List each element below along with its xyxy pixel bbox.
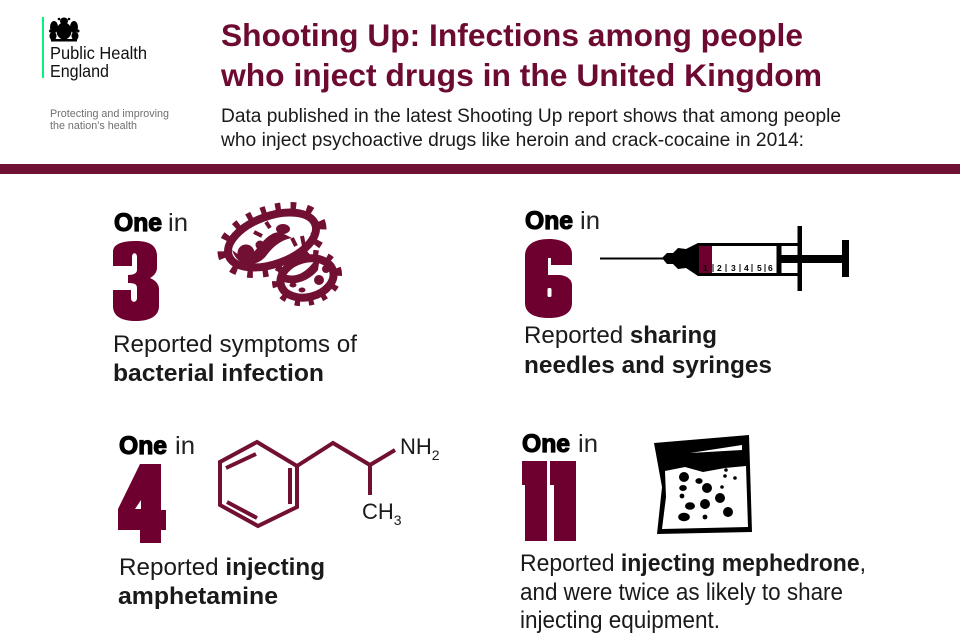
syringe scale numbers: 4 <box>744 263 749 273</box>
logo name <box>50 43 147 81</box>
label: one in: in <box>580 207 600 235</box>
big number 6: 6 <box>552 279 569 312</box>
logo name: England <box>50 61 109 81</box>
syringe scale numbers: 5 <box>757 263 762 273</box>
big number 11: 1 <box>556 500 575 538</box>
text: reported sharing: needles and syringes <box>524 352 772 379</box>
title: Shooting Up: Infections among people <box>221 17 803 53</box>
label: one in: One <box>119 432 167 460</box>
label: one in: in <box>168 209 188 237</box>
big number 4 <box>118 464 166 543</box>
syringe scale numbers: 2 <box>717 263 722 273</box>
icon: amphetamine molecule: 2 <box>432 447 440 463</box>
text: reported injecting mephedrone: Reported injecting mephedrone, <box>520 550 866 577</box>
text: reported injecting amphetamine: Reported injecting <box>119 554 325 581</box>
label: one in <box>525 207 600 235</box>
panel: one in 11, mephedrone <box>520 430 866 634</box>
logo name: Public Health <box>50 43 147 63</box>
text: reported injecting mephedrone <box>520 550 866 634</box>
intro text <box>220 106 841 151</box>
icon: amphetamine molecule: NH <box>400 434 432 459</box>
logo tagline: Protecting and improving <box>50 108 169 120</box>
label: one in: in <box>175 432 195 460</box>
intro text: who inject psychoactive drugs like heroin and crack-cocaine in 2014: <box>220 130 804 151</box>
text: reported sharing <box>524 322 772 379</box>
syringe scale numbers: 6 <box>768 263 773 273</box>
icon: amphetamine molecule <box>220 434 440 528</box>
icon: amphetamine molecule: 3 <box>394 512 402 528</box>
header divider band <box>0 164 960 174</box>
text: reported sharing: Reported sharing <box>524 322 717 349</box>
label: one in: One <box>525 207 573 235</box>
label: one in: One <box>114 209 162 237</box>
panel: one in 4, amphetamine <box>118 432 440 610</box>
title <box>220 17 822 93</box>
logo tagline: the nation’s health <box>50 120 137 132</box>
logo tagline <box>50 108 169 132</box>
label: one in: in <box>578 430 598 458</box>
icon: royal crest <box>49 18 80 42</box>
text: reported injecting amphetamine: amphetamine <box>118 583 278 610</box>
label: one in: One <box>522 430 570 458</box>
title: who inject drugs in the United Kingdom <box>220 57 822 93</box>
icon: bacteria <box>221 202 338 303</box>
icon: syringe <box>600 226 849 291</box>
big number 6 <box>525 239 573 318</box>
label: one in <box>522 430 598 458</box>
syringe scale numbers <box>703 263 773 273</box>
text: reported injecting mephedrone: and were twice as likely to share <box>520 579 843 606</box>
panel: one in 6, sharing needles <box>524 207 849 379</box>
text: reported symptoms: Reported symptoms of <box>113 331 357 358</box>
intro text: Data published in the latest Shooting Up report shows that among people <box>221 106 841 127</box>
big number 4: 4 <box>141 465 160 503</box>
label: one in <box>114 209 188 237</box>
icon: amphetamine molecule: CH <box>362 499 394 524</box>
panel: one in 3, bacterial infection <box>113 202 357 387</box>
big number 3 <box>113 241 159 321</box>
big number 11 <box>522 461 576 541</box>
big number 3: 3 <box>139 283 157 319</box>
big number 11: 1 <box>526 500 545 538</box>
logo: Public Health England <box>42 17 169 132</box>
syringe scale numbers: 3 <box>731 263 736 273</box>
icon: bag of powder <box>654 435 752 534</box>
label: one in <box>119 432 195 460</box>
text: reported symptoms: bacterial infection <box>113 360 324 387</box>
text: reported injecting mephedrone: injecting equipment. <box>520 607 720 634</box>
syringe scale numbers: 1 <box>703 263 708 273</box>
text: reported symptoms <box>113 331 357 387</box>
text: reported injecting amphetamine <box>118 554 325 610</box>
